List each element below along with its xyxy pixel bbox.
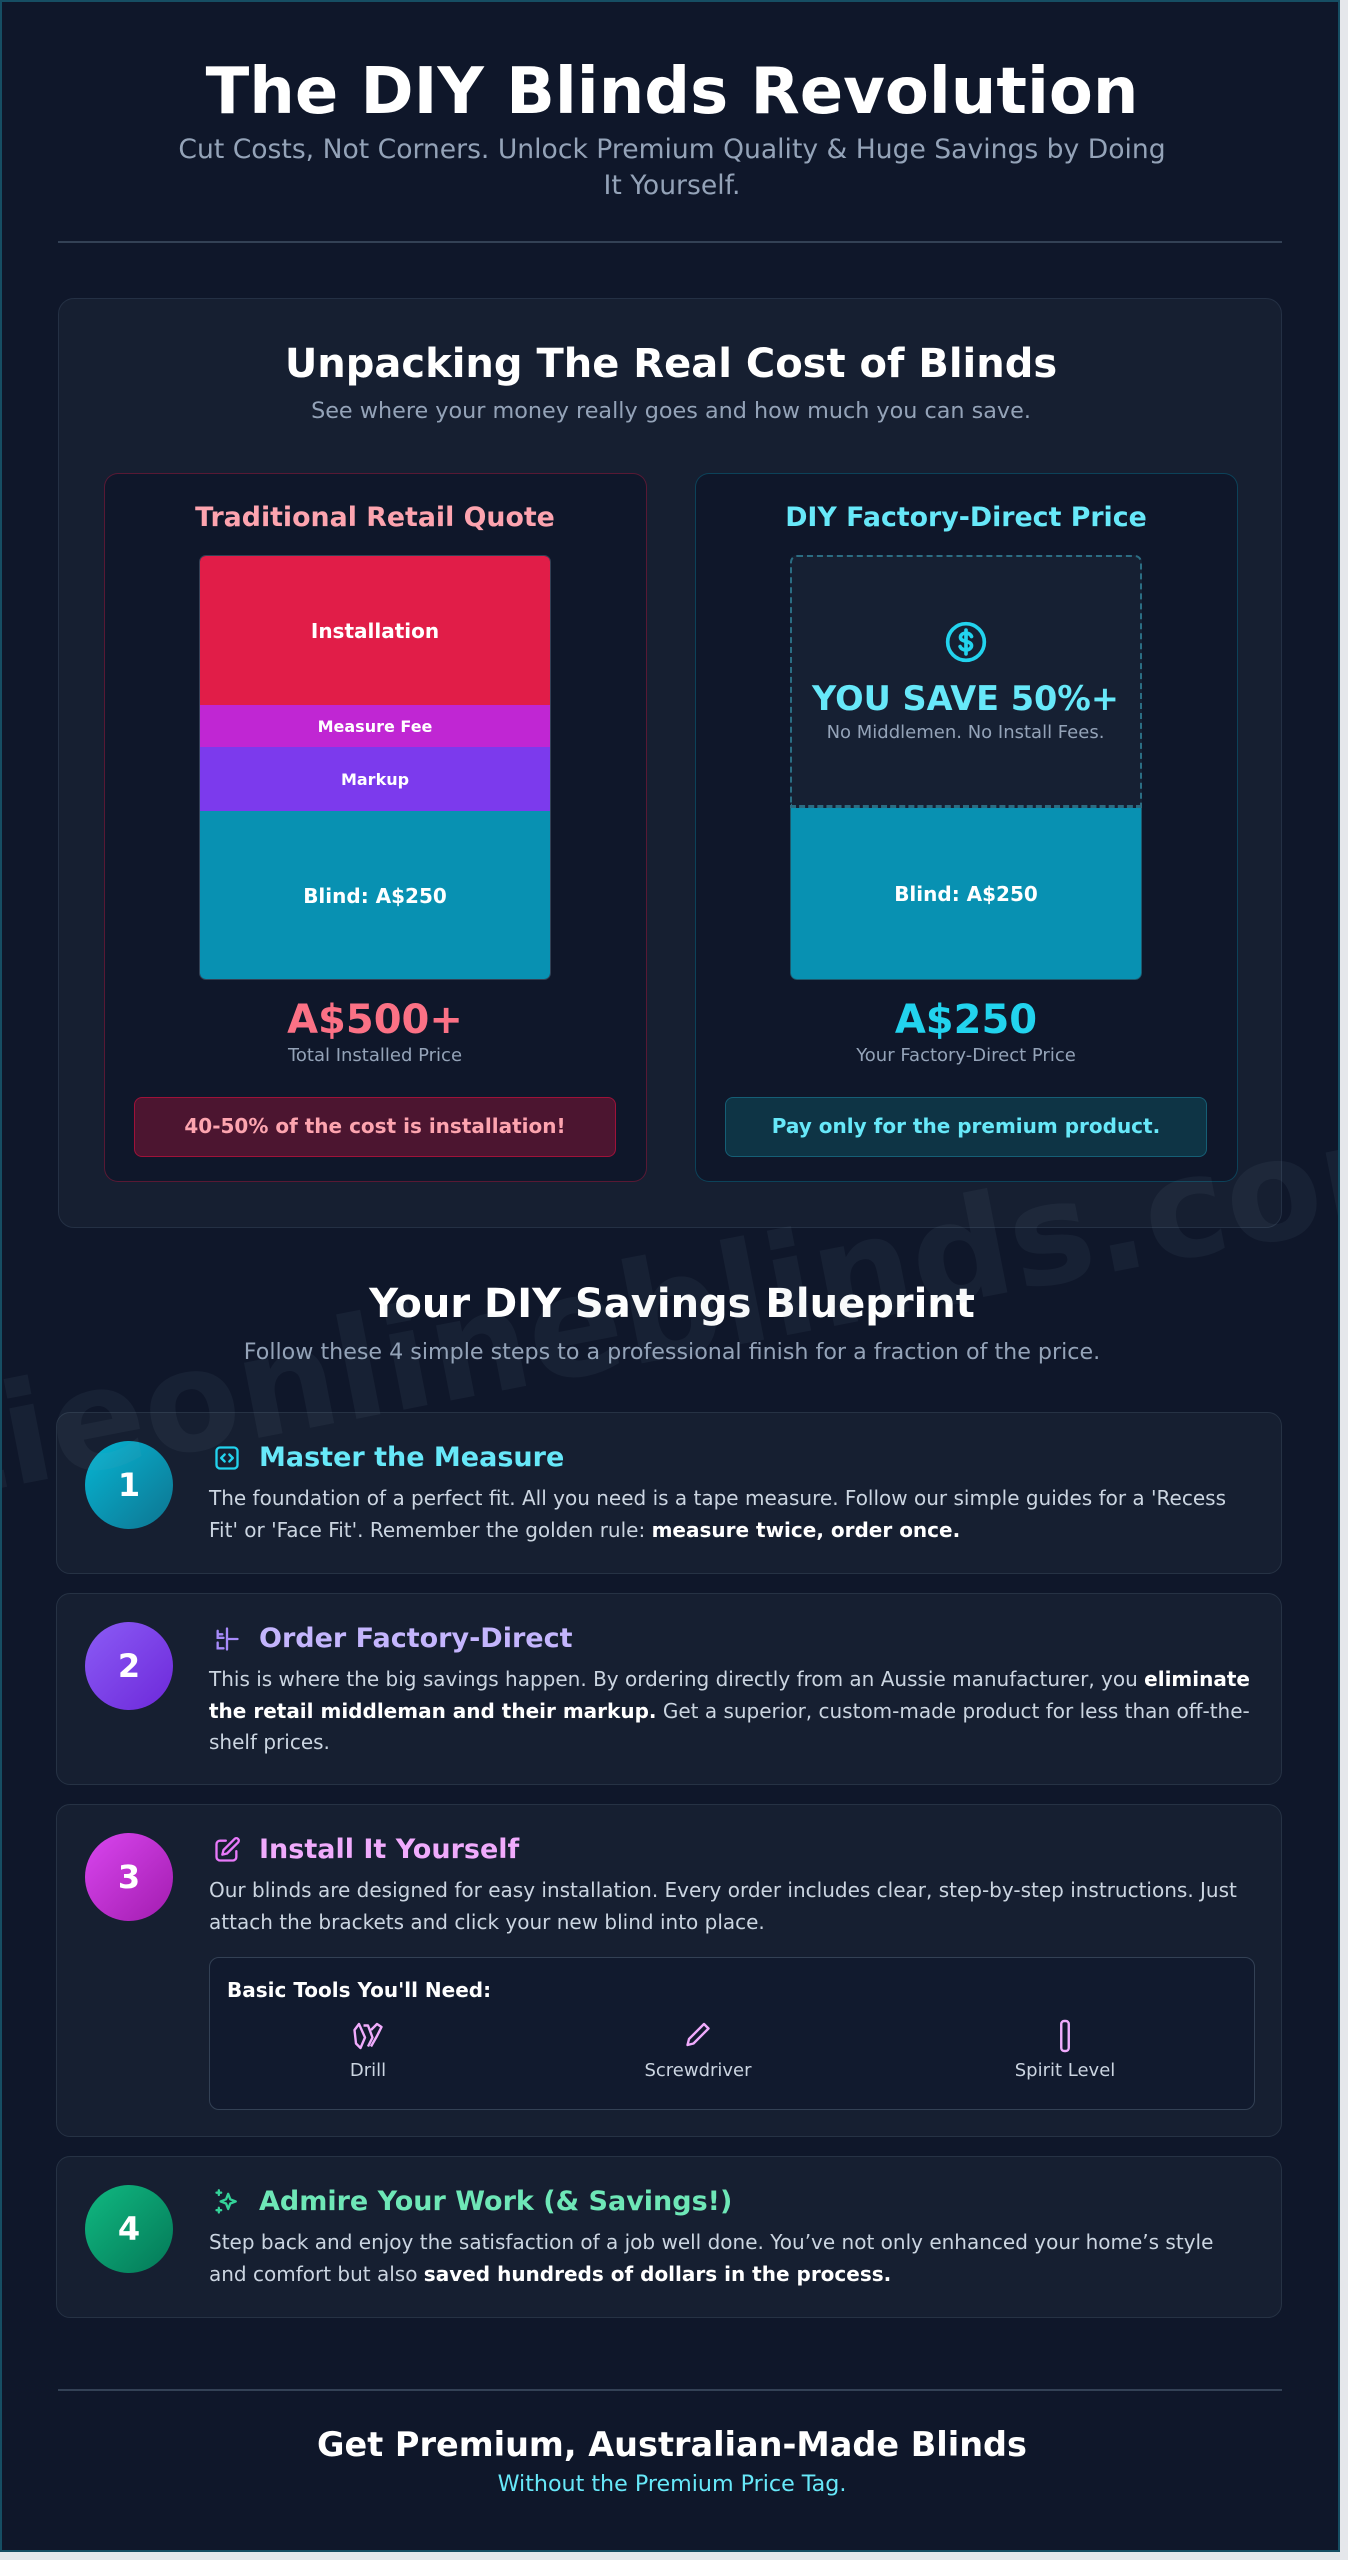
- callout: [134, 1097, 616, 1157]
- number badge: 1: [118, 1466, 140, 1504]
- number badge: [85, 1441, 173, 1529]
- step 1: [56, 1412, 1282, 1574]
- step text: Step back and enjoy the satisfaction of a job well done. You’ve not only enhanced your home’s style and comfort but also saved hundreds of dollars in the process.: [209, 2230, 1213, 2286]
- step title: Order Factory-Direct: [259, 1623, 572, 1654]
- segment: blind: [200, 811, 550, 981]
- subtitle: Cut Costs, Not Corners. Unlock Premium Quality & Huge Savings by Doing It Yourself.: [178, 134, 1166, 201]
- price label: Your Factory-Direct Price: [856, 1045, 1076, 1066]
- panel heading: Unpacking The Real Cost of Blinds: [285, 341, 1057, 387]
- step text: Our blinds are designed for easy installation. Every order includes clear, step-by-step instructions. Just attach the brackets and click your new blind into place.: [209, 1878, 1237, 1934]
- tool: drill: [350, 2022, 386, 2081]
- callout: [725, 1097, 1207, 1157]
- card: diy factory direct: [695, 473, 1238, 1182]
- step title: Admire Your Work (& Savings!): [259, 2186, 732, 2217]
- segment: installation: Installation: [311, 618, 439, 642]
- footer heading: Get Premium, Australian-Made Blinds: [317, 2425, 1027, 2464]
- step title: Master the Measure: [259, 1442, 564, 1473]
- savings box: [790, 555, 1142, 808]
- segment: measure fee: [200, 705, 550, 747]
- number badge: [85, 2185, 173, 2273]
- card title: DIY Factory-Direct Price: [785, 502, 1147, 533]
- callout: 40-50% of the cost is installation!: [184, 1114, 566, 1138]
- step text: This is where the big savings happen. By ordering directly from an Aussie manufacturer, you eliminate the retail middleman and their markup. Get a superior, custom-made product for less than off-the-shelf prices.: [209, 1667, 1250, 1754]
- segment: blind: Blind: A$250: [303, 884, 447, 908]
- segment: markup: [200, 747, 550, 811]
- tools box: [209, 1957, 1255, 2110]
- step 4: [56, 2156, 1282, 2318]
- tool: drill: Drill: [350, 2060, 386, 2081]
- card title: Traditional Retail Quote: [195, 502, 555, 533]
- bar: [790, 555, 1142, 980]
- tool: spirit level: [1015, 2020, 1115, 2081]
- number badge: 3: [118, 1858, 140, 1896]
- footer tagline: Without the Premium Price Tag.: [498, 2471, 846, 2497]
- step 2: [56, 1593, 1282, 1785]
- section subtitle: Follow these 4 simple steps to a professional finish for a fraction of the price.: [244, 1339, 1100, 1365]
- segment: installation: [200, 556, 550, 705]
- segment: measure fee: Measure Fee: [318, 716, 432, 736]
- title: The DIY Blinds Revolution: [206, 55, 1138, 129]
- step text: The foundation of a perfect fit. All you need is a tape measure. Follow our simple guides for a 'Recess Fit' or 'Face Fit'. Remember the golden rule: measure twice, order once.: [209, 1486, 1226, 1542]
- price: A$250: [895, 997, 1037, 1043]
- callout: Pay only for the premium product.: [772, 1114, 1160, 1138]
- number badge: [85, 1622, 173, 1710]
- savings headline: YOU SAVE 50%+: [812, 679, 1119, 718]
- section heading: Your DIY Savings Blueprint: [369, 1281, 975, 1327]
- price: A$500+: [287, 997, 463, 1043]
- panel: cost comparison: [58, 298, 1282, 1228]
- segment: blind: Blind: A$250: [894, 882, 1038, 906]
- step title: Install It Yourself: [259, 1834, 519, 1865]
- card: traditional retail: [104, 473, 647, 1182]
- number badge: 4: [118, 2210, 140, 2248]
- number badge: 2: [118, 1647, 140, 1685]
- step 3: [56, 1804, 1282, 2137]
- number badge: [85, 1833, 173, 1921]
- segment: markup: Markup: [341, 770, 409, 788]
- icon: dollar: [946, 622, 986, 662]
- price label: Total Installed Price: [288, 1045, 462, 1066]
- savings note: No Middlemen. No Install Fees.: [827, 722, 1104, 743]
- tools heading: Basic Tools You'll Need:: [227, 1978, 491, 2002]
- panel subtitle: See where your money really goes and how much you can save.: [311, 398, 1031, 424]
- tool: screwdriver: Screwdriver: [644, 2060, 752, 2081]
- stacked bar: [199, 555, 551, 980]
- tool: spirit level: Spirit Level: [1015, 2060, 1115, 2081]
- segment: blind: [790, 808, 1142, 980]
- tool: screwdriver: [644, 2022, 752, 2081]
